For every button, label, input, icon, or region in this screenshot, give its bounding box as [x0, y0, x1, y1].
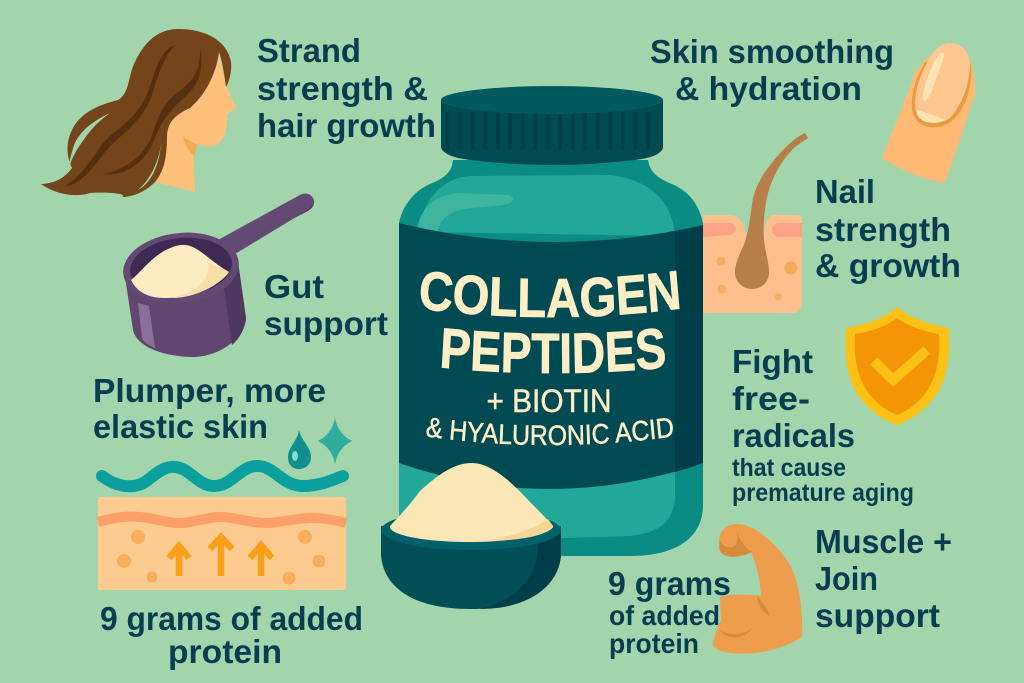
label right shading [675, 225, 703, 472]
text: nail strength and growth [815, 173, 961, 284]
icon: water drop [288, 430, 311, 469]
text: gut support: Gut [264, 268, 324, 305]
text: strand strength and hair growth: Strand [257, 32, 361, 69]
text: 9 grams, right: 9 grams [608, 565, 731, 602]
text: plumper more elastic skin [93, 372, 326, 445]
icon: purple scoop with powder [120, 194, 314, 357]
text: of added protein, right: protein [609, 628, 699, 659]
icon: shield with check [846, 307, 949, 425]
icon: flexed arm [713, 524, 802, 654]
text: strand strength and hair growth: strength & [257, 70, 428, 107]
icon: skin surface wave [102, 466, 343, 486]
icon: hair and face profile [41, 29, 237, 197]
icon: hair follicle in skin [703, 133, 808, 313]
text: 9 grams of added protein, left: protein [168, 633, 282, 670]
text: strand strength and hair growth [257, 32, 436, 144]
text: nail strength and growth: Nail [815, 173, 875, 210]
bottle [399, 86, 703, 556]
text: 9 grams of added protein, left [100, 600, 363, 670]
text: strand strength and hair growth: hair growth [257, 107, 436, 144]
text: of added protein, right: of added [609, 600, 720, 631]
bottle cap [441, 86, 663, 165]
text: 9 grams of added protein, left: 9 grams of added [100, 600, 363, 637]
text: nail strength and growth: strength [815, 211, 951, 248]
icon: fingernail [882, 43, 975, 183]
text: muscle and joint support: Muscle + [815, 523, 952, 560]
text: skin smoothing and hydration: Skin smoothing [650, 33, 894, 70]
text: gut support [264, 268, 388, 342]
text: skin smoothing and hydration [650, 33, 894, 107]
text: muscle and joint support: Join [815, 560, 878, 597]
text: fight free radicals [732, 343, 914, 507]
text: muscle and joint support [815, 523, 952, 634]
text: fight free radicals: Fight [732, 343, 813, 380]
text: of added protein, right [609, 600, 720, 659]
bottle body [399, 160, 703, 556]
label subtitle: hyaluronic acid: & HYALURONIC ACID [426, 418, 673, 446]
text: fight free radicals: free- [732, 380, 810, 417]
text: plumper more elastic skin: Plumper, more [93, 372, 326, 409]
panel: plumped skin cross-section [98, 497, 346, 590]
text: muscle and joint support: support [815, 597, 940, 634]
label subtitle: biotin: + BIOTIN [486, 383, 612, 419]
bottle label [399, 223, 703, 489]
text: nail strength and growth: & growth [815, 247, 961, 284]
bottle base highlight [399, 463, 675, 541]
label title: peptides: PEPTIDES [442, 328, 665, 374]
text: plumper more elastic skin: elastic skin [93, 408, 268, 445]
text: fight free radicals: premature aging [732, 479, 914, 507]
text: fight free radicals: that cause [732, 454, 846, 482]
icon: bowl of powder [381, 463, 561, 609]
text: gut support: support [264, 305, 388, 342]
label title: collagen: COLLAGEN [420, 270, 680, 318]
bottle gloss streak [417, 193, 513, 236]
text: skin smoothing and hydration: & hydration [675, 70, 862, 107]
text: fight free radicals: radicals [732, 417, 855, 454]
icon: sparkle [318, 418, 352, 464]
bottle shoulder highlight [417, 175, 675, 236]
